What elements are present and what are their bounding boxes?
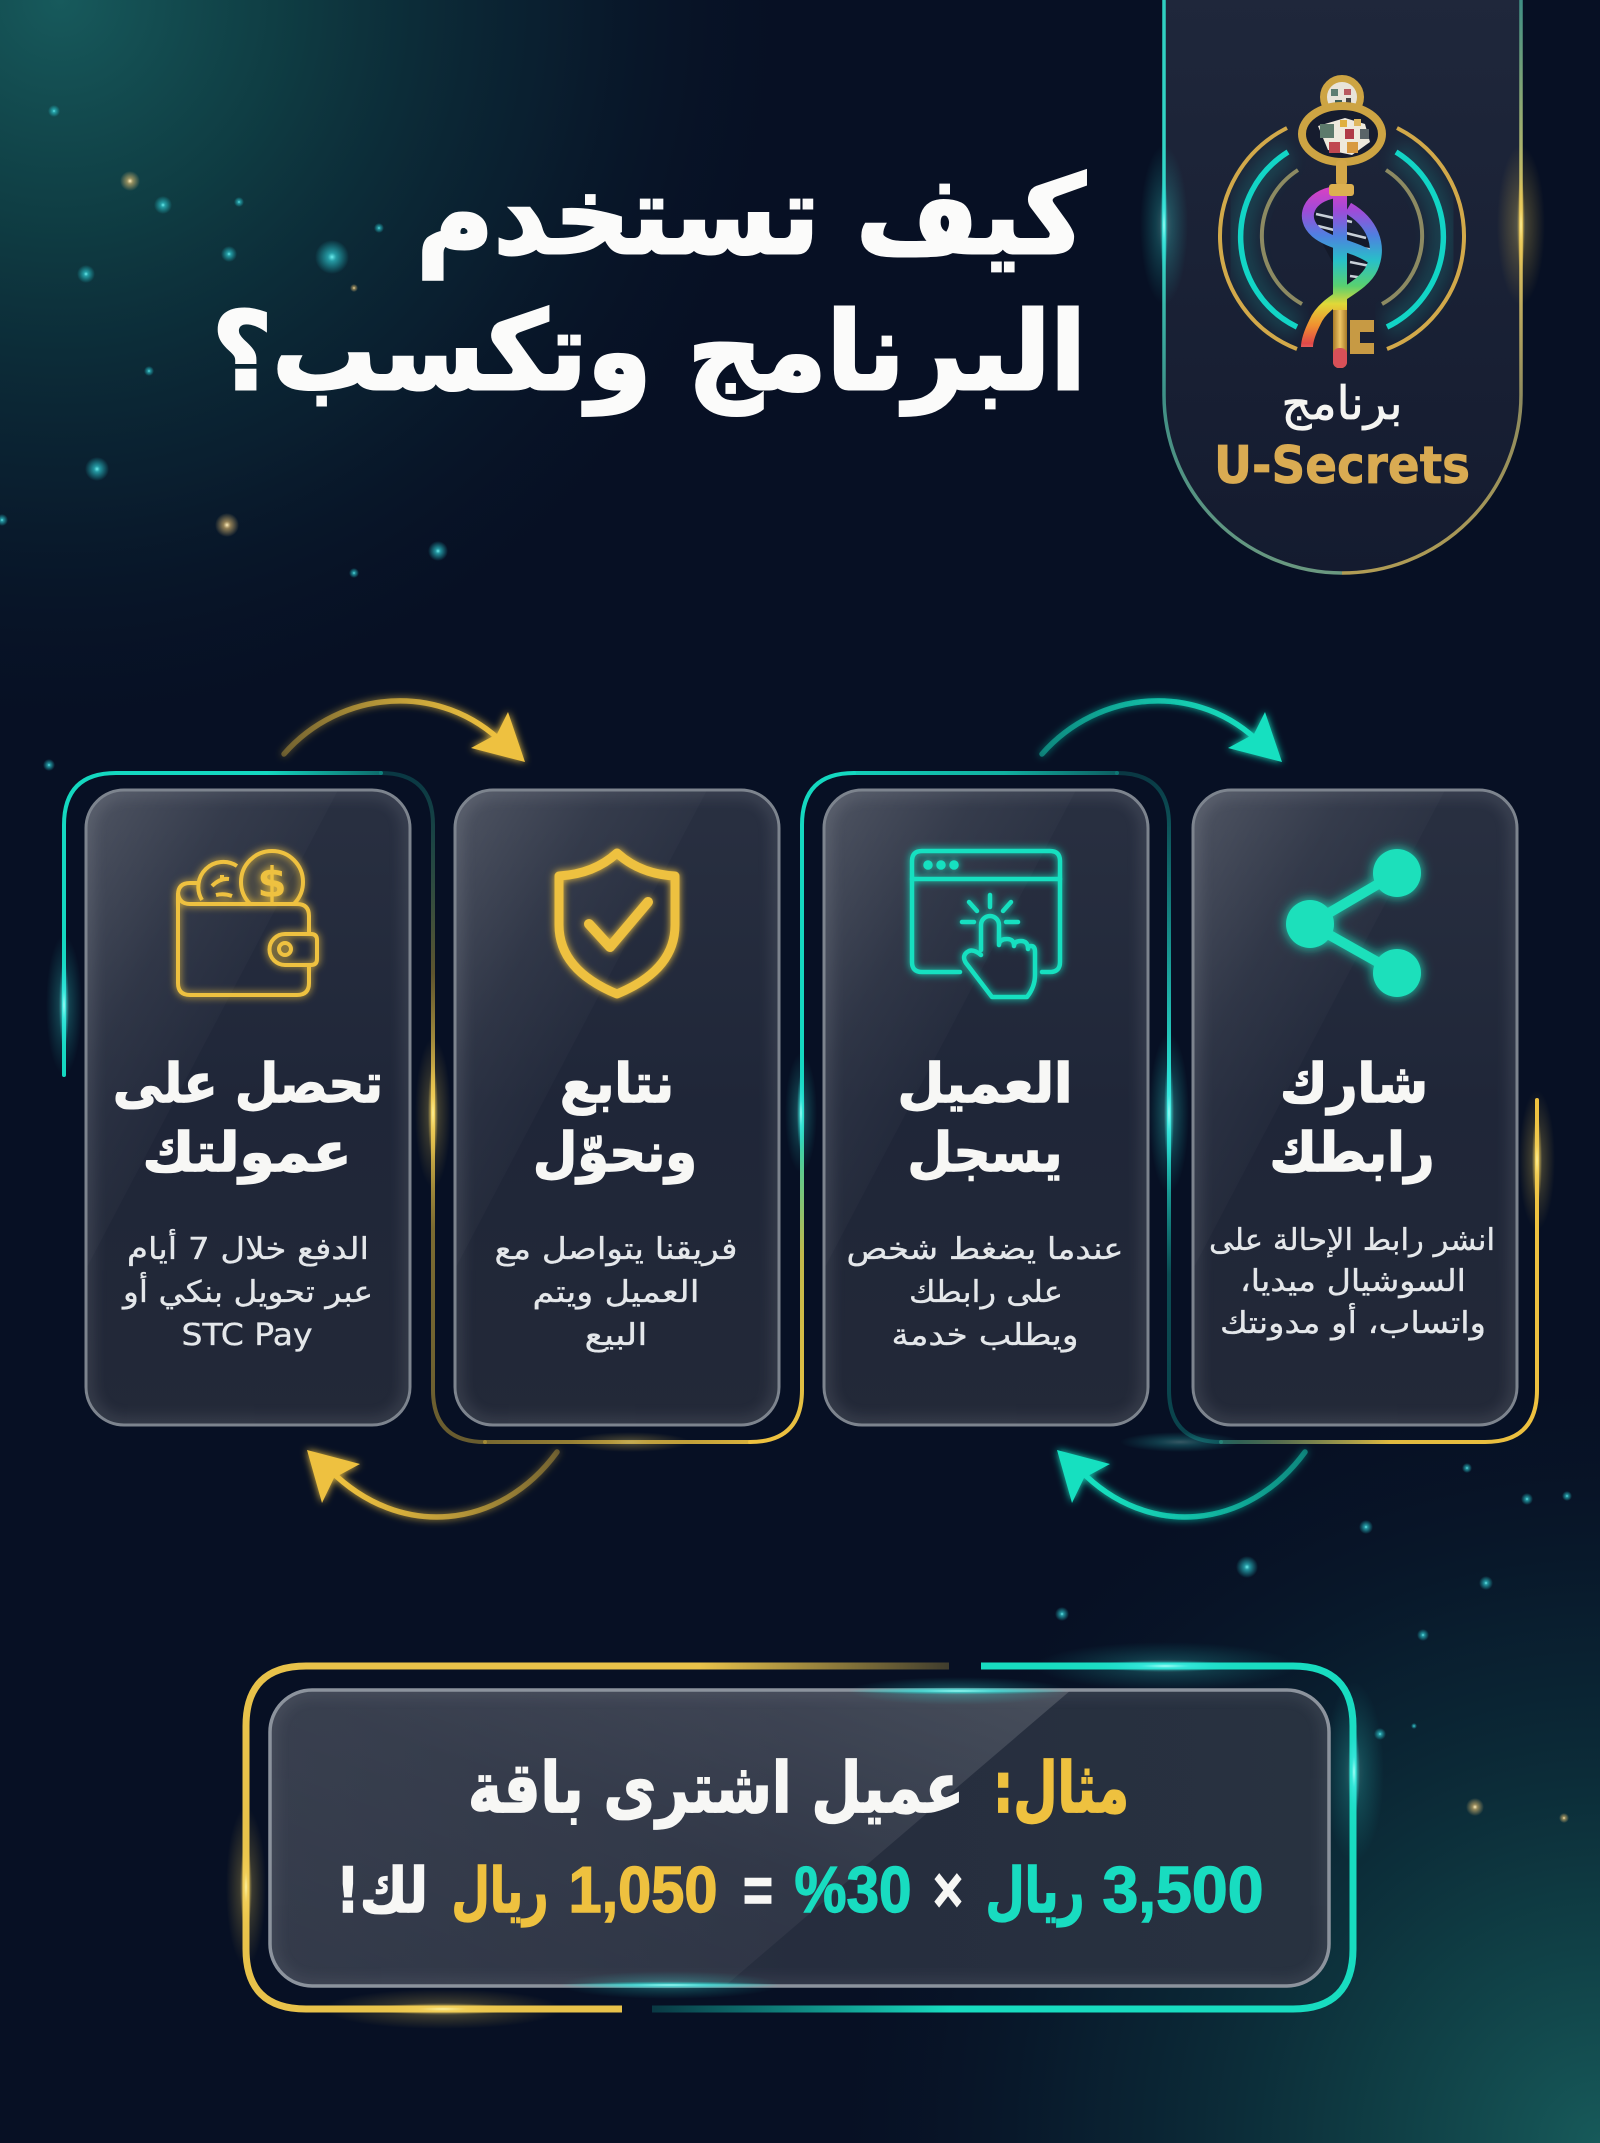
description: عندما يضغط شخص xyxy=(846,1232,1124,1267)
heading: نتابع xyxy=(560,1052,674,1115)
description: ويطلب خدمة xyxy=(892,1318,1078,1353)
heading xyxy=(1270,1052,1434,1184)
example heading: عميل اشترى باقة xyxy=(468,1747,964,1829)
title: البرنامج وتكسب؟ xyxy=(212,290,1086,416)
heading xyxy=(533,1052,697,1184)
example equation: ريال xyxy=(986,1854,1084,1927)
heading: عمولتك xyxy=(142,1121,352,1184)
particles xyxy=(0,105,1572,1841)
description: فريقنا يتواصل مع xyxy=(494,1232,738,1267)
description xyxy=(494,1232,738,1353)
panel: logo badge xyxy=(1140,0,1545,573)
heading: رابطك xyxy=(1270,1121,1434,1184)
description: واتساب، أو مدونتك xyxy=(1220,1302,1486,1341)
example frame xyxy=(226,1642,1384,2029)
heading: يسجل xyxy=(908,1121,1062,1184)
heading xyxy=(113,1052,383,1184)
panel: card 2 follow up xyxy=(455,790,779,1425)
arrow: teal top xyxy=(1042,701,1282,762)
icon: key with DNA helix xyxy=(1302,78,1382,368)
flow connector line xyxy=(46,773,1555,1452)
arrow: gold top xyxy=(284,701,525,762)
example equation: 1,050 xyxy=(568,1853,718,1926)
badge label: برنامج: برنامج xyxy=(1282,376,1402,431)
description xyxy=(846,1232,1124,1353)
arrow: teal bottom xyxy=(1057,1450,1305,1517)
heading xyxy=(898,1052,1072,1184)
description: انشر رابط الإحالة على xyxy=(1209,1223,1495,1258)
icon: share xyxy=(1286,849,1421,997)
icon: browser click xyxy=(912,851,1060,997)
icon: wallet xyxy=(178,851,317,995)
panel: card 1 commission xyxy=(86,790,410,1425)
panel: card 4 share link xyxy=(1193,790,1517,1425)
icon: signal arcs xyxy=(1220,128,1464,349)
example equation: 3,500 xyxy=(1102,1853,1264,1926)
description: عبر تحويل بنكي أو xyxy=(121,1271,373,1310)
description: STC Pay xyxy=(182,1318,312,1353)
badge label: U-Secrets: U-Secrets xyxy=(1214,436,1470,496)
heading: ونحوّل xyxy=(533,1121,697,1184)
title xyxy=(212,154,1086,416)
description: السوشيال ميديا، xyxy=(1240,1264,1466,1299)
panel: card 3 customer registers xyxy=(824,790,1148,1425)
description xyxy=(121,1228,373,1353)
description: على رابطك xyxy=(909,1275,1063,1310)
description xyxy=(1209,1223,1495,1341)
heading: شارك xyxy=(1280,1052,1428,1115)
example equation: × xyxy=(933,1853,963,1926)
title: كيف تستخدم xyxy=(416,154,1086,279)
icon: wallet: $ xyxy=(257,858,287,907)
heading: تحصل على xyxy=(113,1052,383,1115)
example equation: ريال xyxy=(452,1854,548,1927)
example heading: مثال: xyxy=(993,1747,1129,1829)
example equation xyxy=(336,1853,1264,1927)
example equation: %30 xyxy=(794,1853,912,1926)
description: العميل ويتم xyxy=(532,1275,700,1310)
helix rungs xyxy=(1314,212,1370,285)
description: البيع xyxy=(584,1318,648,1353)
heading: العميل xyxy=(898,1052,1072,1115)
panel: example calculation xyxy=(270,1677,1329,1999)
example equation: لك! xyxy=(336,1854,428,1927)
icon: shield xyxy=(559,853,675,994)
arrow: gold bottom xyxy=(307,1450,557,1517)
description: الدفع خلال 7 أيام xyxy=(127,1228,369,1267)
example equation: = xyxy=(743,1853,773,1926)
